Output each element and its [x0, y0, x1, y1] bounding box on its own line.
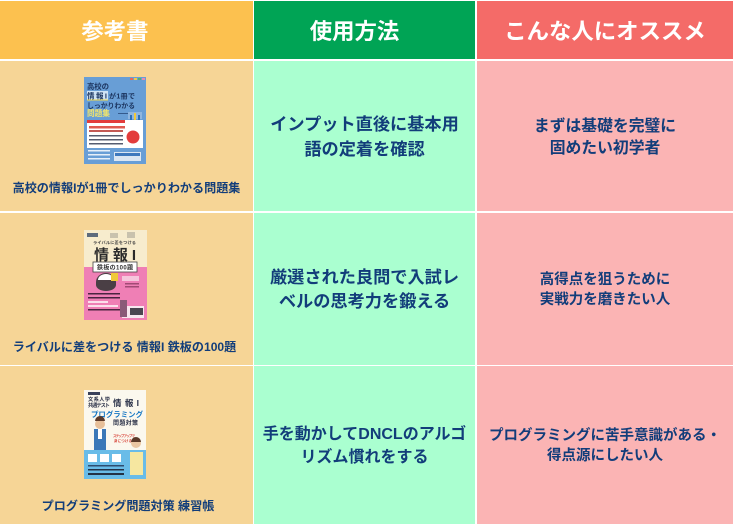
book cover: プログラミング問題対策: 情報I: [113, 398, 139, 408]
panel: row 3 audience: [477, 366, 733, 524]
usage text 3: 手を動かしてDNCLのアルゴ: [263, 426, 466, 443]
book cover: 高校の情報I問題集: が1冊で: [109, 92, 135, 100]
book cover: 情報I 鉄板の100題: 鉄板の100題: [97, 264, 133, 272]
book cover: 高校の情報I問題集: 情報I: [87, 90, 107, 100]
book cover: プログラミング問題対策: ステップアップで: [113, 433, 136, 438]
book cover: プログラミング問題対策: 共通テスト: [88, 401, 110, 409]
usage text 2: [270, 267, 459, 311]
book cover: プログラミング問題対策: 問題対策: [113, 419, 138, 427]
audience text 2: 実戦力を磨きたい人: [540, 292, 670, 308]
book cover: 高校の情報I問題集: 問題集: [87, 108, 110, 118]
book cover: プログラミング問題対策: [84, 390, 146, 479]
panel: row 3 book: [0, 366, 252, 524]
panel: row 2 book: [0, 213, 252, 364]
audience text 1: まずは基礎を完璧に: [534, 118, 676, 135]
book cover: 高校の情報I問題集: [84, 77, 146, 164]
usage text 3: [263, 425, 466, 466]
book cover: プログラミング問題対策: プログラミング: [91, 410, 144, 419]
panel: row 2 audience: [477, 213, 733, 364]
header: reference books: [0, 1, 252, 59]
usage text 3: リズム慣れをする: [300, 449, 428, 466]
book title 1: 高校の情報Iが1冊でしっかりわかる問題集: [13, 181, 240, 195]
usage text 2: ベルの思考力を鍛える: [279, 291, 450, 311]
usage text 1: インプット直後に基本用: [270, 114, 459, 134]
book cover: 情報I 鉄板の100題: 情報I: [94, 246, 136, 264]
header: reference books: 参考書: [81, 19, 149, 44]
usage text 2: 厳選された良問で入試レ: [270, 267, 459, 287]
audience text 2: 高得点を狙うために: [540, 272, 670, 288]
audience text 3: プログラミングに苦手意識がある・: [489, 428, 721, 444]
panel: row 1 audience: [477, 61, 733, 211]
book cover: 情報I 鉄板の100題: [84, 230, 147, 320]
audience text 1: [534, 117, 676, 157]
header: how to use: 使用方法: [310, 19, 399, 44]
book cover: 高校の情報I問題集: しっかりわかる: [87, 101, 135, 110]
header: recommended for: こんな人にオススメ: [504, 19, 706, 44]
book cover: プログラミング問題対策: 身につける: [114, 438, 132, 443]
panel: row 1 usage: [254, 61, 475, 211]
audience text 2: [540, 271, 670, 308]
usage text 1: [270, 114, 459, 159]
panel: row 2 usage: [254, 213, 475, 364]
header: how to use: [254, 1, 475, 59]
header: recommended for: [477, 1, 733, 59]
audience text 1: 固めたい初学者: [550, 140, 660, 157]
usage text 1: 語の定着を確認: [304, 139, 425, 159]
audience text 3: 得点源にしたい人: [547, 448, 663, 464]
book cover: プログラミング問題対策: 文系人学: [88, 395, 110, 403]
book cover: 高校の情報I問題集: 高校の: [87, 82, 109, 91]
panel: row 3 usage: [254, 366, 475, 524]
panel: row 1 book: [0, 61, 252, 211]
audience text 3: [489, 427, 721, 464]
book title 3: プログラミング問題対策 練習帳: [42, 499, 214, 513]
book title 2: ライバルに差をつける 情報I 鉄板の100題: [13, 340, 236, 354]
book cover: 情報I 鉄板の100題: ライバルに差をつける: [93, 239, 136, 246]
